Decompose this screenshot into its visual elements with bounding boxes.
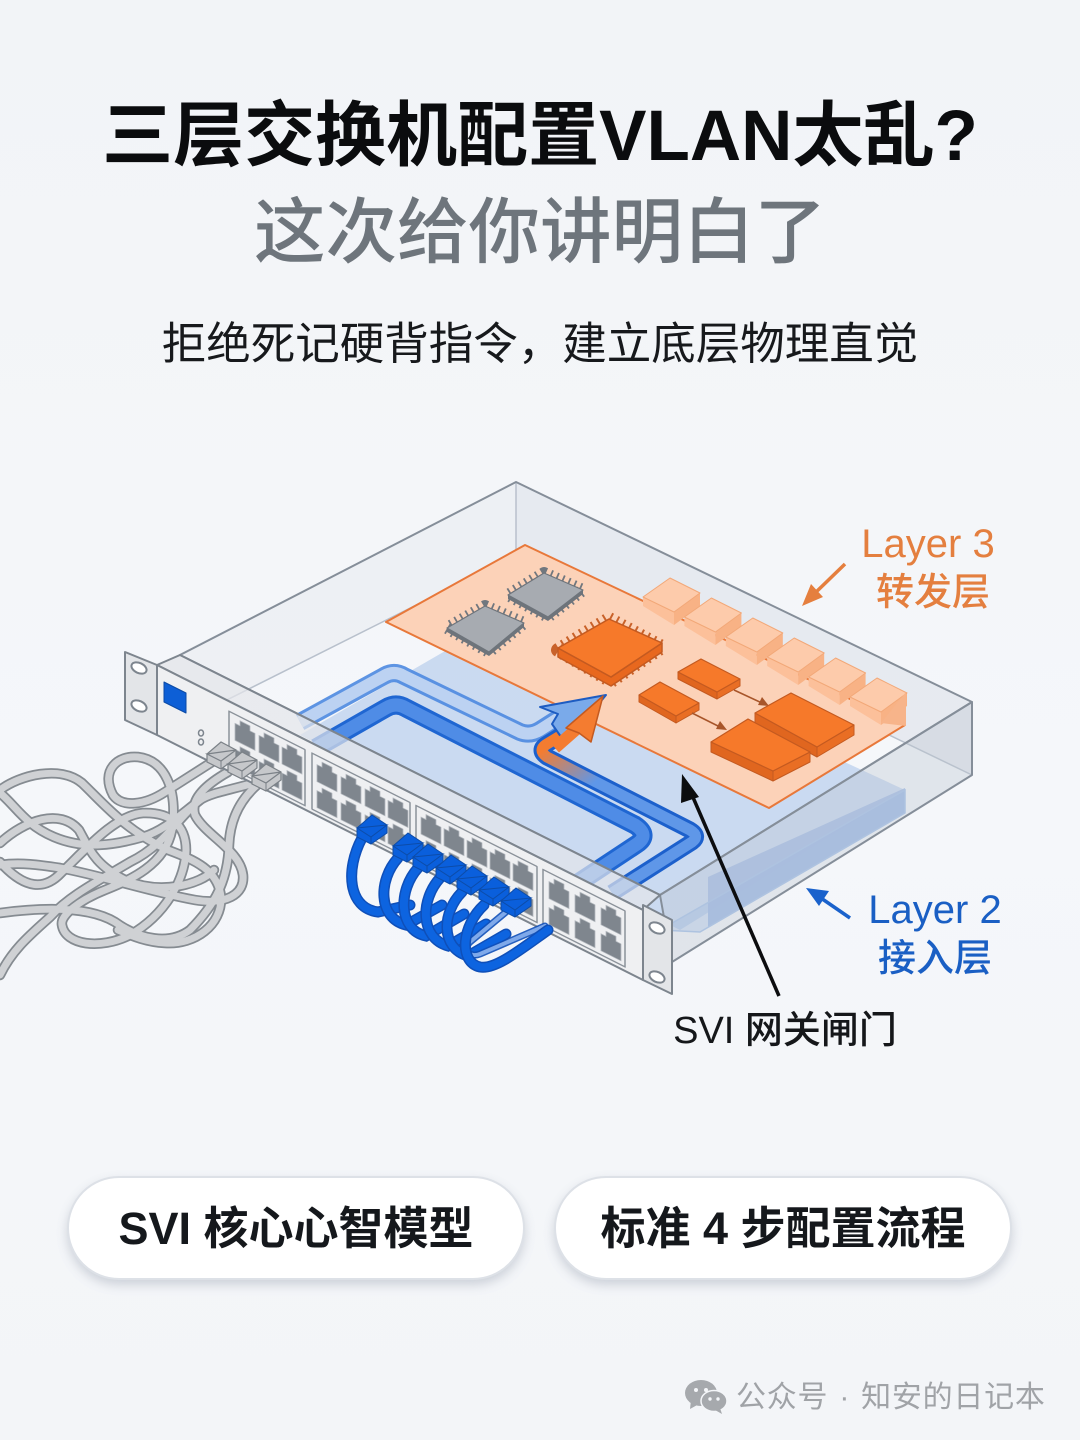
label: SVI gateway: SVI 网关闸门 bbox=[673, 1010, 897, 1052]
orange arrow head bbox=[555, 696, 603, 748]
blue patch cables bbox=[352, 838, 548, 967]
path: middle route bbox=[316, 705, 643, 885]
pill button: SVI mental model: SVI 核心心智模型 bbox=[118, 1203, 474, 1254]
label: Layer 2: 接入层 bbox=[878, 938, 992, 980]
blue arrow head bbox=[540, 695, 606, 744]
port groups bbox=[229, 711, 625, 967]
title: main heading: 三层交换机配置VLAN太乱? bbox=[102, 97, 978, 176]
label: Layer 3: Layer 3 bbox=[861, 522, 995, 566]
heat sink row bbox=[643, 578, 907, 726]
right rack ear bbox=[643, 905, 672, 994]
layer 2 access floor bbox=[300, 610, 905, 932]
small forwarding blocks and arrows bbox=[639, 659, 769, 730]
blue data paths bbox=[300, 673, 696, 893]
label: Layer 2: Layer 2 bbox=[868, 888, 1002, 932]
gray tangled cables bbox=[0, 757, 257, 975]
arrow: SVI gateway pointer bbox=[681, 774, 779, 996]
gray chips bbox=[447, 573, 583, 656]
front panel of switch bbox=[125, 652, 672, 994]
orange layer 3 board bbox=[386, 545, 907, 808]
gray cable connectors bbox=[207, 742, 281, 791]
path: upper pale route bbox=[300, 673, 562, 734]
blue cable connectors bbox=[357, 815, 531, 917]
translucent case shell bbox=[180, 482, 972, 962]
main orange ASIC chip bbox=[558, 619, 662, 686]
pill button: 4 step config bbox=[554, 1176, 1012, 1280]
pill button: SVI mental model bbox=[67, 1176, 525, 1280]
subtitle: 拒绝死记硬背指令，建立底层物理直觉 bbox=[162, 320, 918, 369]
status LEDs bbox=[198, 730, 204, 745]
icon: WeChat bbox=[685, 1380, 726, 1414]
arrow: layer 3 pointer bbox=[802, 564, 845, 606]
icon: blue power square bbox=[164, 682, 186, 713]
inner back edges of the case bbox=[157, 482, 972, 775]
left rack ear bbox=[125, 652, 157, 735]
arrow: layer 2 pointer bbox=[806, 888, 850, 918]
label: Layer 3 bbox=[861, 522, 995, 614]
large forwarding blocks bbox=[711, 693, 854, 781]
watermark text: 公众号 · 知安的日记本 bbox=[736, 1381, 1046, 1414]
label: Layer 2 bbox=[868, 888, 1002, 980]
pill button: 4 step config: 标准 4 步配置流程 bbox=[600, 1203, 966, 1254]
label: Layer 3: 转发层 bbox=[876, 572, 990, 614]
title: second heading line: 这次给你讲明白了 bbox=[254, 193, 826, 273]
path: lower route ending in orange arrow bbox=[542, 724, 696, 893]
watermark bbox=[685, 1380, 1046, 1414]
